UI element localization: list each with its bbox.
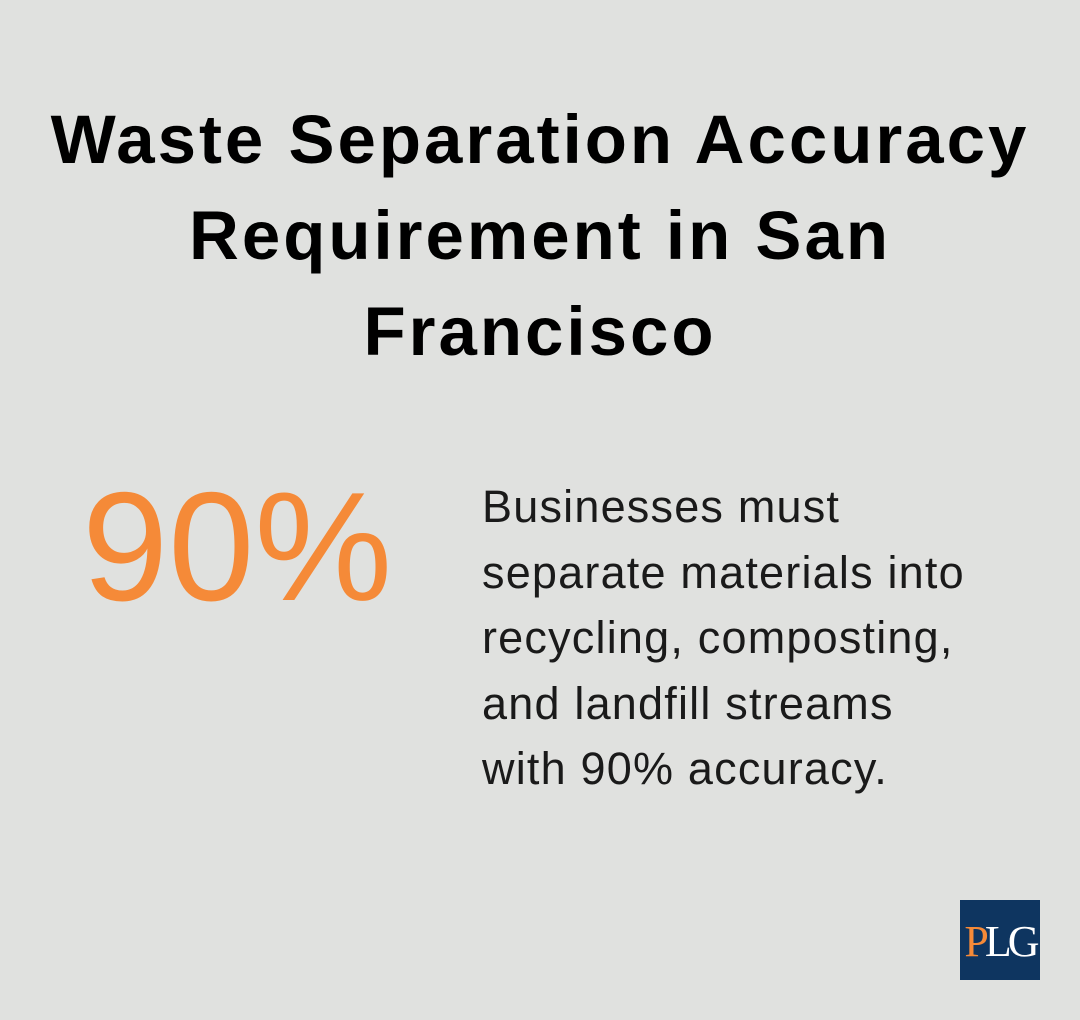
title bbox=[50, 101, 1029, 370]
description text bbox=[482, 481, 965, 794]
big statistic: 90% bbox=[82, 460, 392, 633]
title: Francisco bbox=[364, 293, 716, 370]
description text: separate materials into bbox=[482, 546, 965, 598]
logo: PLG bbox=[960, 900, 1040, 980]
logo: PLG: PLG bbox=[964, 917, 1036, 966]
title: Waste Separation Accuracy bbox=[51, 101, 1029, 178]
description text: Businesses must bbox=[482, 481, 840, 532]
description text: recycling, composting, bbox=[482, 612, 954, 663]
description text: with 90% accuracy. bbox=[482, 743, 888, 794]
description text: and landfill streams bbox=[482, 678, 894, 728]
title: Requirement in San bbox=[189, 197, 891, 274]
